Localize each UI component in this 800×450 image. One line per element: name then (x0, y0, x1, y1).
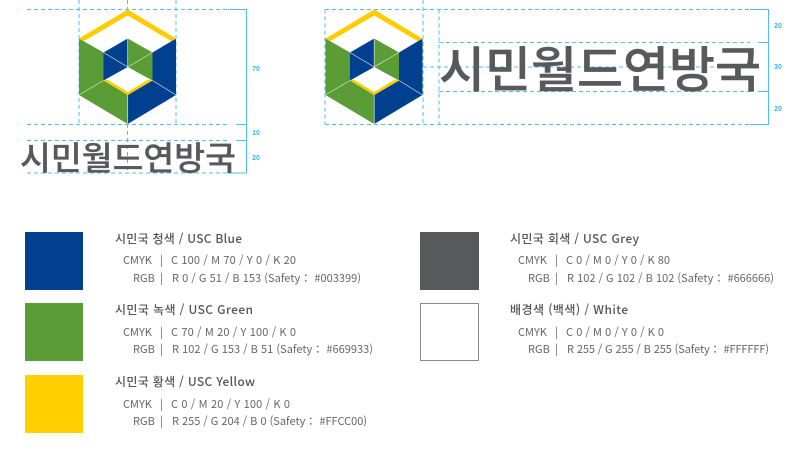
dimension labels: vertical lockup (252, 66, 260, 162)
swatch: USC Grey (420, 232, 479, 290)
color spec: White: R 255 / G 255 / B 255 (Safety： #FFFFFF) (567, 341, 769, 357)
color spec: USC Green: 시민국 녹색 / USC Green (115, 301, 253, 318)
dimension labels: horizontal lockup: 30 (774, 64, 782, 71)
color spec: USC Grey: RGB (528, 270, 550, 286)
dimension labels: horizontal lockup (774, 23, 782, 113)
color spec: USC Yellow: RGB (133, 413, 155, 429)
wordmark: horizontal lockup: 시민월드연방국 (439, 31, 761, 102)
color spec: USC Green: | (160, 341, 163, 357)
color spec: USC Green (115, 301, 373, 357)
color spec: USC Blue: RGB (133, 270, 155, 286)
guides: vertical logo (27, 0, 246, 173)
logo mark: vertical lockup (79, 10, 176, 124)
color spec: White: | (555, 324, 558, 340)
wordmark: vertical lockup: 시민월드연방국 (20, 132, 236, 180)
dimension labels: vertical lockup: 20 (252, 155, 260, 162)
color spec: USC Yellow: C 0 / M 20 / Y 100 / K 0 (171, 396, 290, 412)
swatch: USC Blue (25, 232, 83, 290)
color spec: White: C 0 / M 0 / Y 0 / K 0 (566, 324, 664, 340)
color spec: USC Yellow: CMYK (123, 396, 153, 412)
color spec: USC Green: R 102 / G 153 / B 51 (Safety： #669933) (172, 341, 373, 357)
color spec: USC Green: CMYK (123, 324, 153, 340)
color spec: USC Blue: 시민국 청색 / USC Blue (115, 230, 242, 247)
color spec: USC Blue: CMYK (123, 252, 153, 268)
dimension labels: vertical lockup: 10 (252, 130, 260, 137)
logo mark: horizontal lockup (326, 10, 422, 124)
color spec: USC Blue: | (160, 252, 163, 268)
color spec: White (510, 301, 769, 357)
color spec: USC Blue: R 0 / G 51 / B 153 (Safety： #003399) (172, 270, 361, 286)
color spec: USC Green: RGB (133, 341, 155, 357)
color spec: White: | (555, 341, 558, 357)
dimension labels: horizontal lockup: 20 (774, 106, 782, 113)
swatch: USC Yellow (25, 375, 83, 433)
color spec: USC Grey (510, 230, 774, 286)
color spec: USC Blue: C 100 / M 70 / Y 0 / K 20 (171, 252, 296, 268)
color spec: USC Grey: CMYK (518, 252, 548, 268)
swatch: White (420, 304, 478, 360)
color spec: White: CMYK (518, 324, 548, 340)
color spec: White: 배경색 (백색) / White (510, 301, 628, 318)
swatch: USC Green (25, 303, 83, 361)
color spec: USC Grey: 시민국 회색 / USC Grey (510, 230, 639, 247)
color spec: USC Yellow (115, 373, 367, 429)
color spec: USC Green: C 70 / M 20 / Y 100 / K 0 (171, 324, 296, 340)
color spec: USC Grey: | (555, 252, 558, 268)
color spec: USC Grey: | (555, 270, 558, 286)
color spec: White: RGB (528, 341, 550, 357)
color spec: USC Grey: R 102 / G 102 / B 102 (Safety： #666666) (567, 270, 774, 286)
color spec: USC Yellow: 시민국 황색 / USC Yellow (115, 373, 255, 390)
guides: horizontal logo (325, 0, 768, 124)
dimension labels: horizontal lockup: 20 (774, 23, 782, 30)
color spec: USC Blue: | (160, 270, 163, 286)
color spec: USC Yellow: | (160, 396, 163, 412)
color spec: USC Green: | (160, 324, 163, 340)
color spec: USC Yellow: R 255 / G 204 / B 0 (Safety： #FFCC00) (172, 413, 367, 429)
dimension labels: vertical lockup: 70 (252, 66, 260, 73)
color spec: USC Yellow: | (160, 413, 163, 429)
color spec: USC Grey: C 0 / M 0 / Y 0 / K 80 (566, 252, 670, 268)
color spec: USC Blue (115, 230, 361, 286)
